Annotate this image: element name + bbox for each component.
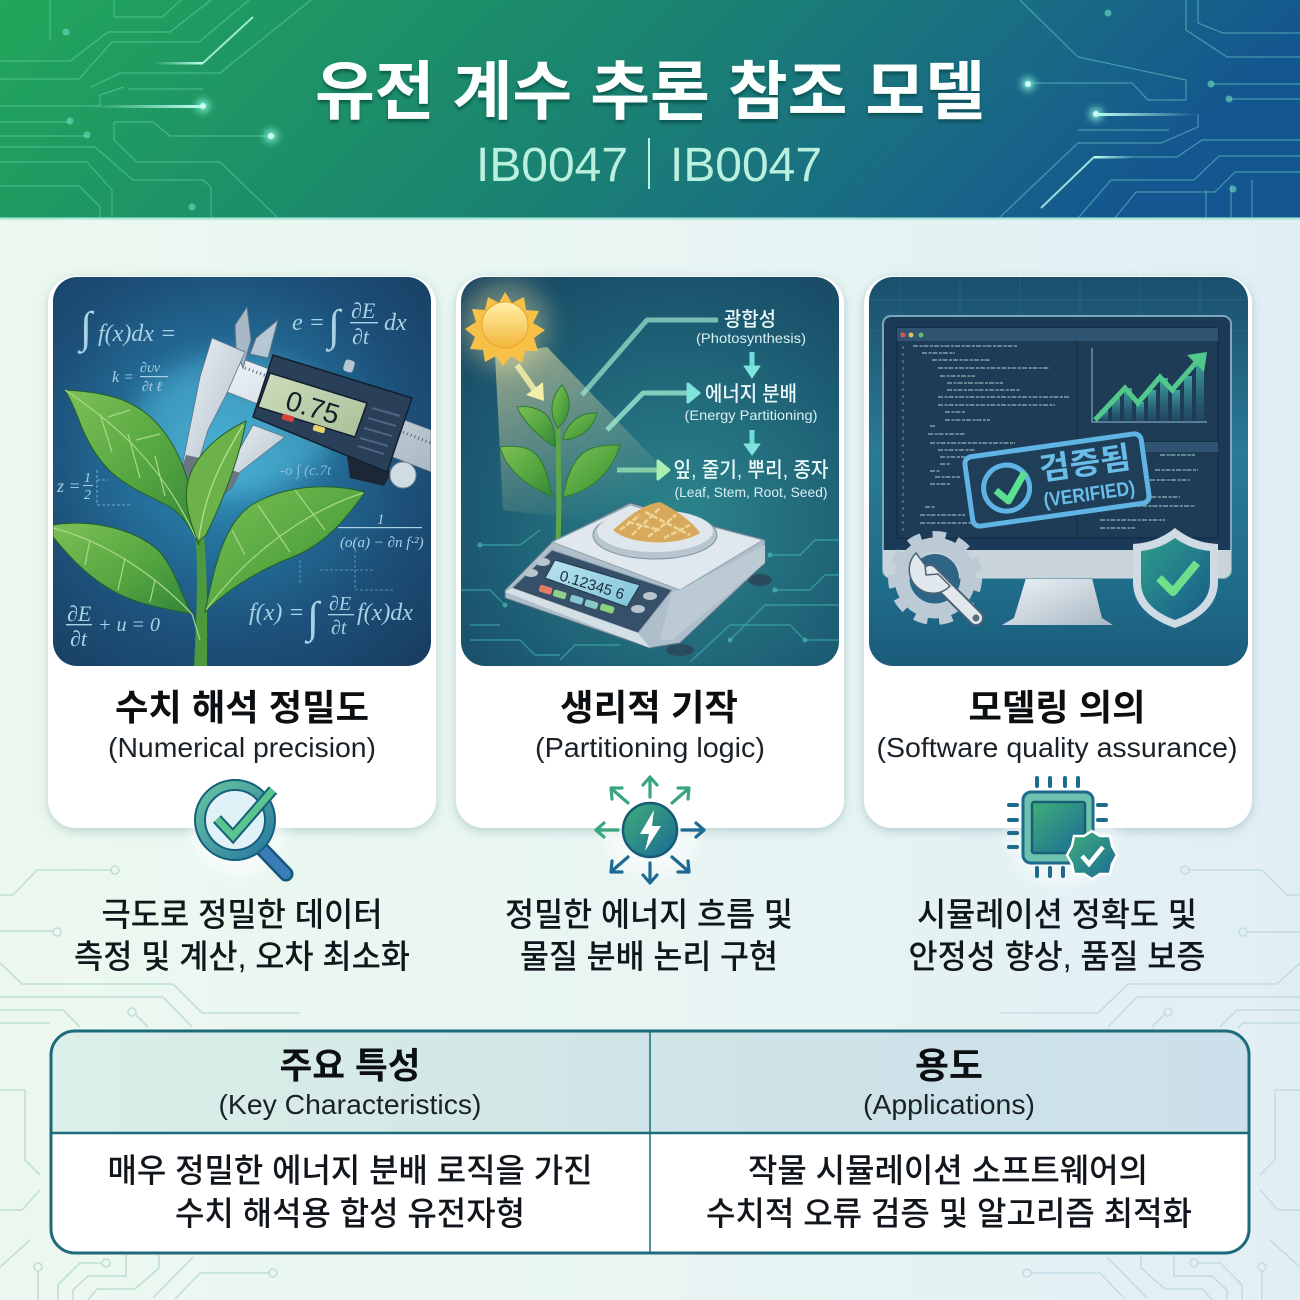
scale	[505, 502, 772, 656]
summary table	[51, 1031, 1249, 1253]
math formulas: (o(a) − ∂n f·²)	[340, 535, 424, 551]
title: 유전 계수 추론 참조 모델	[315, 56, 985, 128]
math formulas: ∂ᴜᴠ	[140, 361, 161, 376]
verified stamp: 검증됨	[1037, 440, 1133, 487]
flow labels	[674, 308, 828, 500]
chart	[1092, 348, 1207, 422]
illustration: caliper measuring leaf	[53, 277, 431, 670]
math formulas: f(x) =	[249, 600, 304, 626]
flow labels: 광합성	[724, 308, 776, 331]
code lines	[903, 346, 1198, 535]
math formulas: ∫	[304, 593, 322, 644]
math formulas: k =	[112, 369, 134, 386]
flow labels: (Photosynthesis)	[696, 330, 806, 346]
card subheading: (Software quality assurance)	[876, 732, 1238, 763]
header glow traces	[62, 10, 1236, 210]
description: 시뮬레이션 정확도 및	[917, 896, 1197, 933]
card background	[456, 276, 844, 828]
math formulas: ∂t ℓ	[142, 380, 162, 395]
math formulas: ∂E	[329, 593, 351, 615]
math formulas: + u = 0	[98, 614, 160, 636]
caliper	[182, 307, 431, 497]
column: key characteristics: 주요 특성	[280, 1045, 420, 1086]
lcd display	[258, 373, 367, 437]
background circuit pattern	[0, 866, 1300, 1300]
description: 측정 및 계산, 오차 최소화	[74, 938, 410, 975]
math formulas: ∫	[325, 301, 343, 352]
header circuit left	[0, 0, 311, 218]
column: applications: 수치적 오류 검증 및 알고리즘 최적화	[706, 1195, 1192, 1232]
math formulas: e =	[292, 310, 325, 336]
card heading: 수치 해석 정밀도	[115, 687, 369, 728]
math formulas: 2	[84, 488, 91, 503]
flow labels: (Energy Partitioning)	[684, 407, 818, 423]
column: applications: (Applications)	[863, 1089, 1035, 1120]
math formulas: ∂E	[67, 601, 92, 626]
card heading: 모델링 의의	[968, 687, 1146, 728]
verified stamp	[964, 433, 1150, 527]
column: applications: 용도	[915, 1045, 983, 1086]
icon: magnifier with check	[190, 780, 286, 876]
subtitle	[476, 138, 822, 192]
sun	[465, 292, 545, 366]
plant leaves	[53, 390, 365, 670]
card background	[48, 276, 436, 828]
verified stamp: (VERIFIED)	[1042, 477, 1136, 512]
column: applications	[706, 1045, 1192, 1232]
math formulas: f(x)dx	[357, 600, 413, 626]
flow labels: 잎, 줄기, 뿌리, 종자	[674, 459, 828, 482]
panel: partitioning logic	[456, 276, 844, 975]
light beam	[495, 347, 656, 517]
math formulas: 1	[84, 471, 91, 486]
energy arrows	[517, 320, 760, 479]
description	[908, 896, 1206, 975]
header circuit right	[999, 0, 1300, 218]
math formulas: ∂t	[331, 617, 347, 639]
math formulas	[56, 298, 424, 651]
math formulas: 1	[377, 512, 384, 528]
illustration: monitor verified	[869, 277, 1248, 666]
math formulas: ∂t	[70, 626, 88, 651]
caliper: 0.75	[282, 385, 343, 430]
description: 안정성 향상, 품질 보증	[908, 938, 1206, 975]
card subheading: (Partitioning logic)	[535, 732, 765, 763]
card subheading: (Numerical precision)	[108, 732, 376, 763]
scale: 0.12345 6	[557, 568, 626, 603]
card background	[864, 276, 1252, 828]
subtitle: IB0047	[476, 139, 628, 192]
column: key characteristics	[108, 1045, 592, 1232]
icon: chip with badge	[1006, 774, 1118, 886]
column: key characteristics: 매우 정밀한 에너지 분배 로직을 가진	[108, 1152, 592, 1189]
shield with check	[1133, 528, 1218, 628]
plant	[500, 385, 620, 540]
panel: software quality assurance	[864, 276, 1252, 975]
icon: energy radiating	[596, 777, 704, 883]
illustration: plant, sun and scale	[461, 277, 839, 666]
flow labels: 에너지 분배	[705, 383, 797, 406]
math formulas: z =	[56, 476, 81, 496]
math formulas: dx	[384, 310, 407, 336]
description: 물질 분배 논리 구현	[520, 938, 778, 975]
panel: numerical precision	[48, 276, 436, 975]
circuit floor	[461, 530, 839, 662]
monitor	[883, 316, 1231, 625]
description: 정밀한 에너지 흐름 및	[505, 896, 793, 933]
math formulas: ∂t	[352, 324, 370, 349]
subtitle: IB0047	[670, 139, 822, 192]
math formulas: -o ∫ (c.7t	[280, 463, 332, 479]
math formulas: ∂E	[351, 298, 376, 323]
description	[74, 896, 410, 975]
column: applications: 작물 시뮬레이션 소프트웨어의	[748, 1152, 1148, 1189]
description	[505, 896, 793, 975]
header banner	[0, 0, 1300, 220]
card heading: 생리적 기작	[560, 687, 738, 728]
gear with wrench	[893, 536, 980, 622]
table header row	[51, 1031, 1249, 1133]
math formulas: ∫	[77, 303, 95, 354]
flow labels: (Leaf, Stem, Root, Seed)	[674, 484, 828, 500]
math formulas: f(x)dx =	[98, 321, 176, 347]
column: key characteristics: (Key Characteristics)	[218, 1089, 482, 1120]
description: 극도로 정밀한 데이터	[102, 896, 382, 933]
column: key characteristics: 수치 해석용 합성 유전자형	[175, 1195, 525, 1232]
